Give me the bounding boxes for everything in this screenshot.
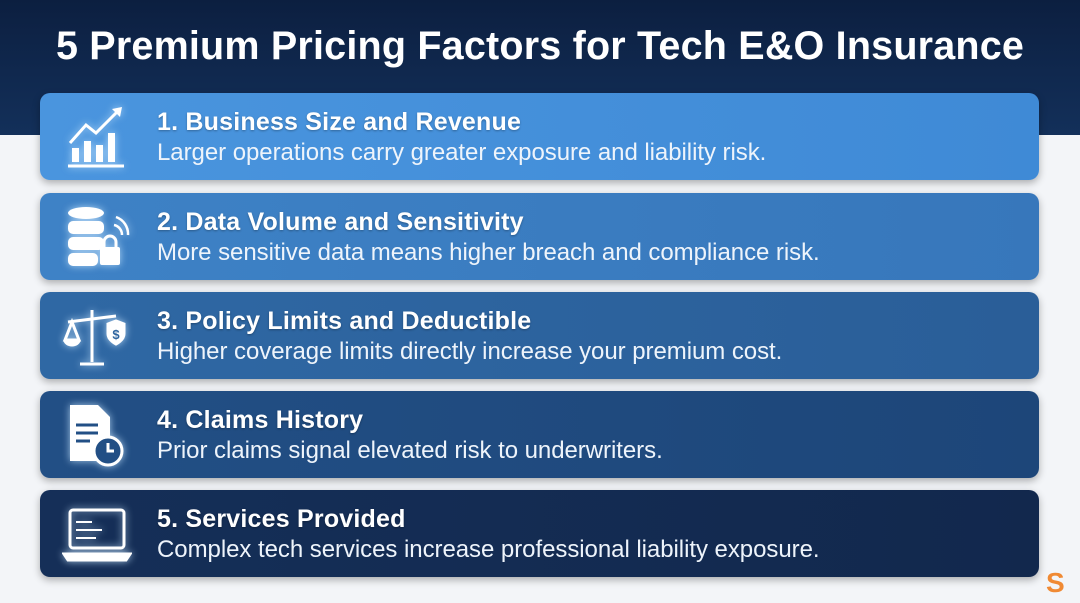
card 5: services: Complex tech services increase professional liability exposure.	[157, 536, 820, 563]
card 4: claims history: Prior claims signal elevated risk to underwriters.	[157, 437, 663, 464]
card 1: business size: 1. Business Size and Revenue	[157, 108, 521, 136]
card 2: data: More sensitive data means higher breach and compliance risk.	[157, 239, 820, 266]
card 3: policy limits	[40, 292, 1039, 379]
header band	[0, 0, 1080, 135]
card 4: claims history: 4. Claims History	[157, 406, 363, 434]
icon: scale and shield: $	[112, 327, 120, 342]
card 3: policy limits: 3. Policy Limits and Deductible	[157, 307, 531, 335]
card 3: policy limits: Higher coverage limits directly increase your premium cost.	[157, 338, 782, 365]
icon: document clock	[64, 399, 129, 472]
icon: scale and shield	[59, 308, 131, 371]
card 5: services	[40, 490, 1039, 577]
card 1: business size	[40, 93, 1039, 180]
icon: database lock	[63, 202, 134, 272]
card 2: data	[40, 193, 1039, 280]
icon: laptop code	[58, 503, 136, 568]
title: 5 Premium Pricing Factors for Tech E&O Insurance	[56, 24, 1024, 68]
card 2: data: 2. Data Volume and Sensitivity	[157, 208, 524, 236]
logo: S	[1046, 567, 1065, 598]
card 1: business size: Larger operations carry greater exposure and liability risk.	[157, 139, 766, 166]
card 4: claims history	[40, 391, 1039, 478]
icon: growth chart	[66, 104, 126, 172]
card 5: services: 5. Services Provided	[157, 505, 406, 533]
